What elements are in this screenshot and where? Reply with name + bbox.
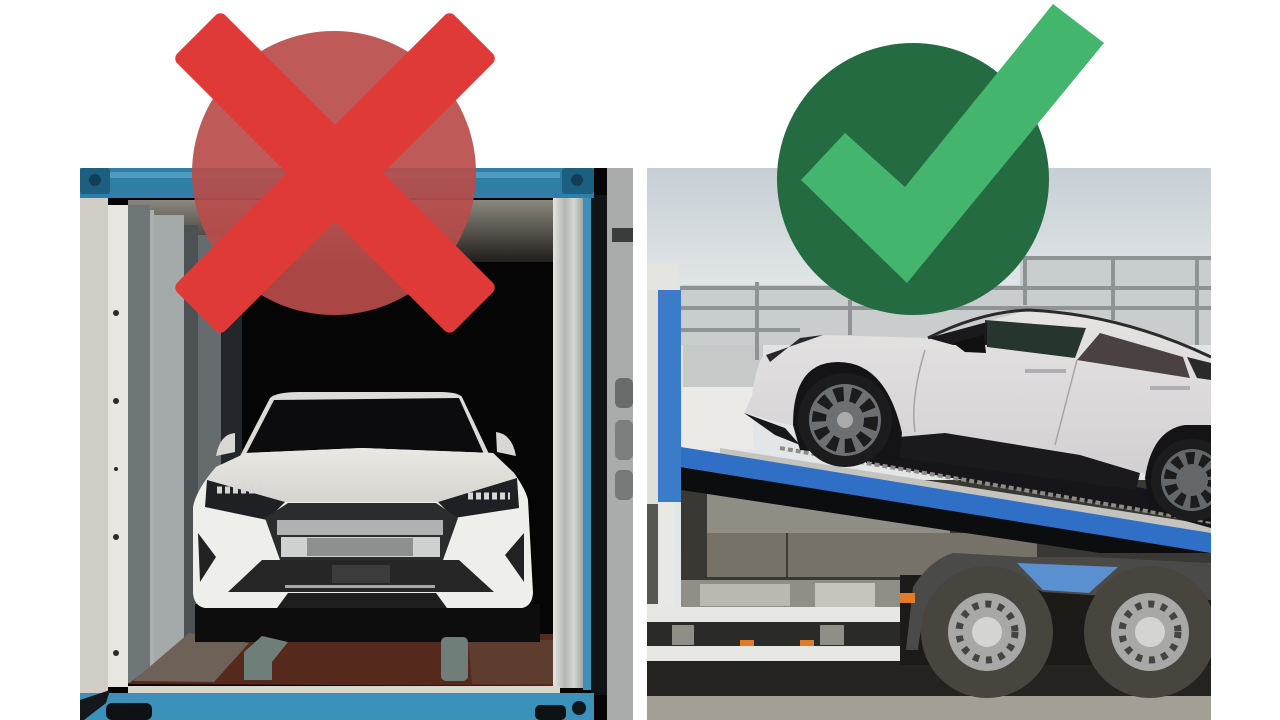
icon: green check in dark circle — [777, 4, 1104, 315]
SUV front wheel — [798, 373, 892, 467]
sky background — [647, 168, 1211, 720]
grille — [265, 503, 458, 560]
sill — [895, 433, 1140, 490]
front bumper — [744, 413, 800, 445]
door lines and handles — [914, 350, 1077, 445]
underbody and ramp track — [866, 440, 1211, 528]
blue bottom beam — [80, 686, 594, 720]
container ceiling — [128, 200, 553, 262]
container left inner wall — [128, 205, 242, 683]
rear windows — [1077, 333, 1190, 378]
panel: car carrier truck (right) — [647, 168, 1280, 720]
wheel arches — [793, 362, 902, 460]
truck wheel 2 — [1084, 566, 1216, 698]
mirror — [953, 335, 986, 353]
icon: red cross in muted circle — [58, 0, 612, 450]
body — [193, 448, 533, 608]
fog lights — [198, 533, 216, 582]
hood — [207, 448, 517, 502]
background fence — [680, 258, 1211, 449]
roof and windshield — [240, 392, 490, 456]
left open door — [80, 194, 128, 694]
headlight — [766, 335, 823, 362]
background wall below ramp — [681, 480, 1211, 610]
panel: container with car (wrong) — [80, 168, 633, 720]
blue loading ramp — [681, 447, 1211, 553]
truck wheel 1 — [921, 566, 1053, 698]
front windows — [985, 320, 1086, 358]
SUV rear wheel — [1151, 439, 1233, 521]
white car front view — [193, 392, 540, 642]
truck frame: posts and rails — [647, 264, 900, 662]
tyres and underbody — [195, 604, 540, 642]
mirrors — [216, 433, 235, 456]
wheel chocks — [244, 636, 468, 681]
container floor — [128, 633, 553, 686]
right edge mask — [1211, 168, 1280, 720]
lower intake — [228, 560, 494, 592]
truck wheels and fender — [900, 553, 1216, 698]
right door and post — [553, 168, 633, 720]
blue top beam — [80, 168, 594, 198]
white SUV on ramp — [744, 310, 1233, 528]
body — [744, 310, 1211, 500]
ground — [647, 661, 1211, 720]
headlights — [205, 480, 285, 520]
